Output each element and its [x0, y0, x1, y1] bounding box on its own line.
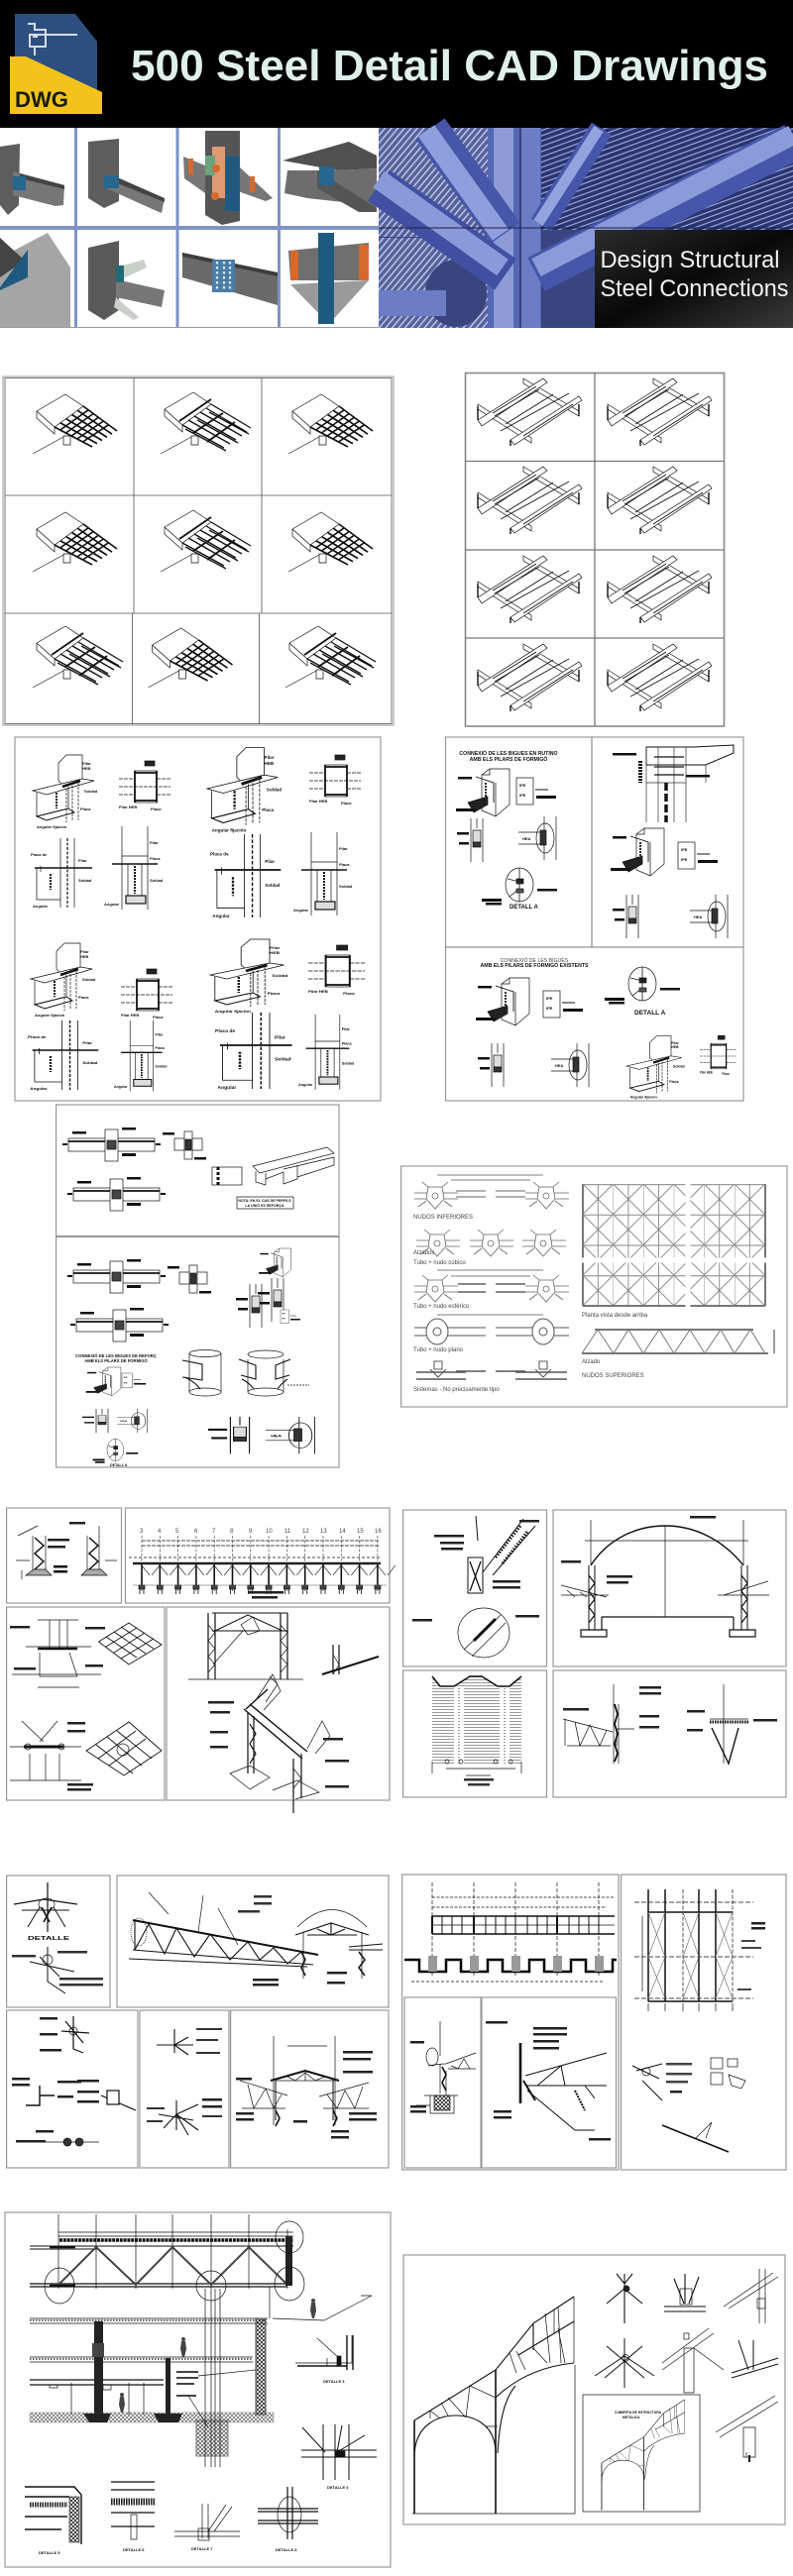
panel: roof wall section	[553, 1670, 786, 1797]
drawing: node details: Alzados	[413, 1250, 434, 1256]
drawing: node details: Tubo + nudo cúbico	[413, 1260, 466, 1266]
drawing: roof truss	[30, 2214, 304, 2304]
panel: base plate details	[7, 1607, 165, 1800]
panel: structural frame elevation	[125, 1508, 396, 1603]
panel: concrete column connections	[446, 737, 743, 1101]
panel: truss joint detail	[7, 1876, 110, 2007]
panel: building section with truss: DETALLE 3	[323, 2379, 345, 2384]
panel: inset truss: CUBIERTA DE ESTRUCTURA	[615, 2411, 662, 2415]
panel: arched truss with nodes	[403, 2255, 785, 2524]
drawing: truss plan	[580, 1181, 769, 1308]
heading: sheet one: CONNEXIÓ DE LES BIGUES EN RUTINO	[459, 749, 558, 757]
chart: axis numbers: 14	[339, 1529, 346, 1535]
panel: beam to column connection sheets	[15, 737, 381, 1101]
drawing: floors and columns	[30, 2318, 268, 2415]
panel: composite deck details grid	[3, 376, 394, 725]
chart: axis numbers: 6	[194, 1529, 198, 1535]
icon: human figures	[119, 2299, 316, 2413]
text block: note box: LA UNIÓ ES REFORÇA	[245, 1203, 284, 1208]
panel: concrete column connections: AMB ELS PILARS DE FORMIGÓ EXISTENTS	[481, 961, 589, 969]
drawing: node details: NUDOS INFERIORES	[413, 1215, 473, 1221]
chart: axis numbers	[140, 1529, 382, 1535]
panel: space truss: NUDOS SUPERIORES	[582, 1373, 644, 1379]
chart: axis numbers: 11	[284, 1529, 291, 1535]
icon: DWG file	[10, 14, 102, 114]
panel: blue steel tube photograph	[379, 128, 793, 328]
panel: node details	[140, 2010, 229, 2168]
callout: caption box	[595, 230, 793, 328]
drawing: node details: Tubo + nudo plano	[413, 1347, 464, 1353]
panel: arch anchor details	[403, 1510, 547, 1666]
chart: axis numbers: 3	[140, 1529, 144, 1535]
drawing: detail callouts	[25, 2335, 377, 2544]
panel: building section with truss	[5, 2212, 391, 2567]
panel: wall section details	[7, 1508, 122, 1603]
panel: corrugated sheet	[403, 1670, 547, 1797]
icon: column splice with orange plates	[183, 131, 273, 225]
icon: beam to column connection 2	[88, 139, 165, 213]
header band	[0, 0, 793, 128]
panel: truss joint detail: DETALLE	[28, 1936, 70, 1942]
chart: axis numbers: 15	[357, 1529, 364, 1535]
icon: beam intersection	[283, 142, 377, 212]
panel: purlin grid details	[465, 373, 724, 726]
icon: tapered connection	[288, 233, 369, 324]
text block: note box	[237, 1197, 293, 1209]
icon: braced column	[88, 241, 165, 320]
panel: bracing plan	[621, 1875, 786, 2170]
panel: concrete column connections: DETALL A	[634, 1010, 666, 1017]
drawing: node details: Tubo + nudo esférico	[413, 1304, 470, 1310]
chart: axis numbers: 16	[375, 1529, 382, 1535]
panel: 3D steel connection tiles	[0, 128, 379, 328]
drawing: node details: Sistemas - No precisamente tipo	[413, 1387, 500, 1393]
drawing: isometric I-beam	[212, 1147, 334, 1185]
panel: concrete column connections: DETALL A	[510, 905, 539, 911]
chart: axis numbers: 8	[230, 1529, 234, 1535]
panel: space truss	[401, 1166, 787, 1407]
chart: axis numbers: 7	[212, 1529, 216, 1535]
panel: portal frame details	[167, 1607, 390, 1813]
panel: roof connection sheets	[57, 1105, 339, 1467]
panel: building section with truss: DETALLE 6	[123, 2547, 145, 2552]
chart: axis numbers: 5	[175, 1529, 179, 1535]
panel: arched section	[553, 1510, 786, 1666]
panel: elevation and sections	[402, 1875, 619, 2170]
drawing: arched truss	[414, 2297, 574, 2514]
chart: axis numbers: 9	[249, 1529, 253, 1535]
panel: building section with truss: DETALLE 5	[39, 2550, 60, 2555]
panel: sloped roof truss	[117, 1876, 389, 2007]
icon: beam to column connection 1	[0, 144, 64, 215]
panel: inset truss: METÁLICA	[623, 2415, 640, 2419]
chart: axis numbers: 13	[320, 1529, 327, 1535]
panel: roof connection sheets: DETALL A	[110, 1463, 128, 1467]
panel: joint details	[7, 2010, 138, 2168]
panel: gable frame section	[231, 2010, 389, 2168]
icon: beam into concrete	[0, 233, 70, 327]
text block: plan caption: Planta vista desde arriba	[582, 1313, 648, 1319]
panel: space truss: Alzado	[582, 1359, 601, 1365]
drawing: round columns	[182, 1349, 309, 1396]
title: 500 Steel Detail CAD Drawings	[131, 42, 768, 90]
panel: roof connection sheets: AMB ELS PILARS DE FORMIGÓ	[84, 1358, 148, 1363]
icon: DWG file: DWG	[15, 87, 68, 112]
panel: concrete column connections: AMB ELS PILARS DE FORMIGÓ	[470, 755, 547, 763]
drawing: facade grid	[432, 1882, 615, 1977]
panel: inset truss	[583, 2395, 700, 2512]
chart: axis numbers: 10	[266, 1529, 273, 1535]
icon: beam splice	[182, 253, 278, 305]
callout: caption box: Design Structural	[601, 247, 779, 273]
text block: note box: NOTA: EN EL CAS DE PERFILS	[238, 1199, 291, 1203]
heading: sheet two: CONNEXIÓ DE LES BIGUES	[501, 957, 569, 964]
heading: reinforced columns: CONNEXIÓ DE LES BIGUES DE REFORÇ	[75, 1353, 157, 1358]
panel: building section with truss: DETALLE 7	[191, 2546, 213, 2551]
drawing: node details	[413, 1175, 569, 1393]
callout: caption box: Steel Connections	[601, 275, 789, 302]
chart: axis numbers: 12	[302, 1529, 309, 1535]
drawing: node details	[595, 2269, 778, 2462]
panel: building section with truss: DETALLE 4	[327, 2485, 349, 2490]
chart: axis numbers: 4	[158, 1529, 162, 1535]
drawing: truss elevation	[582, 1330, 774, 1353]
panel: building section with truss: DETALLE 8	[276, 2547, 297, 2552]
drawing: column with beam	[613, 745, 734, 822]
